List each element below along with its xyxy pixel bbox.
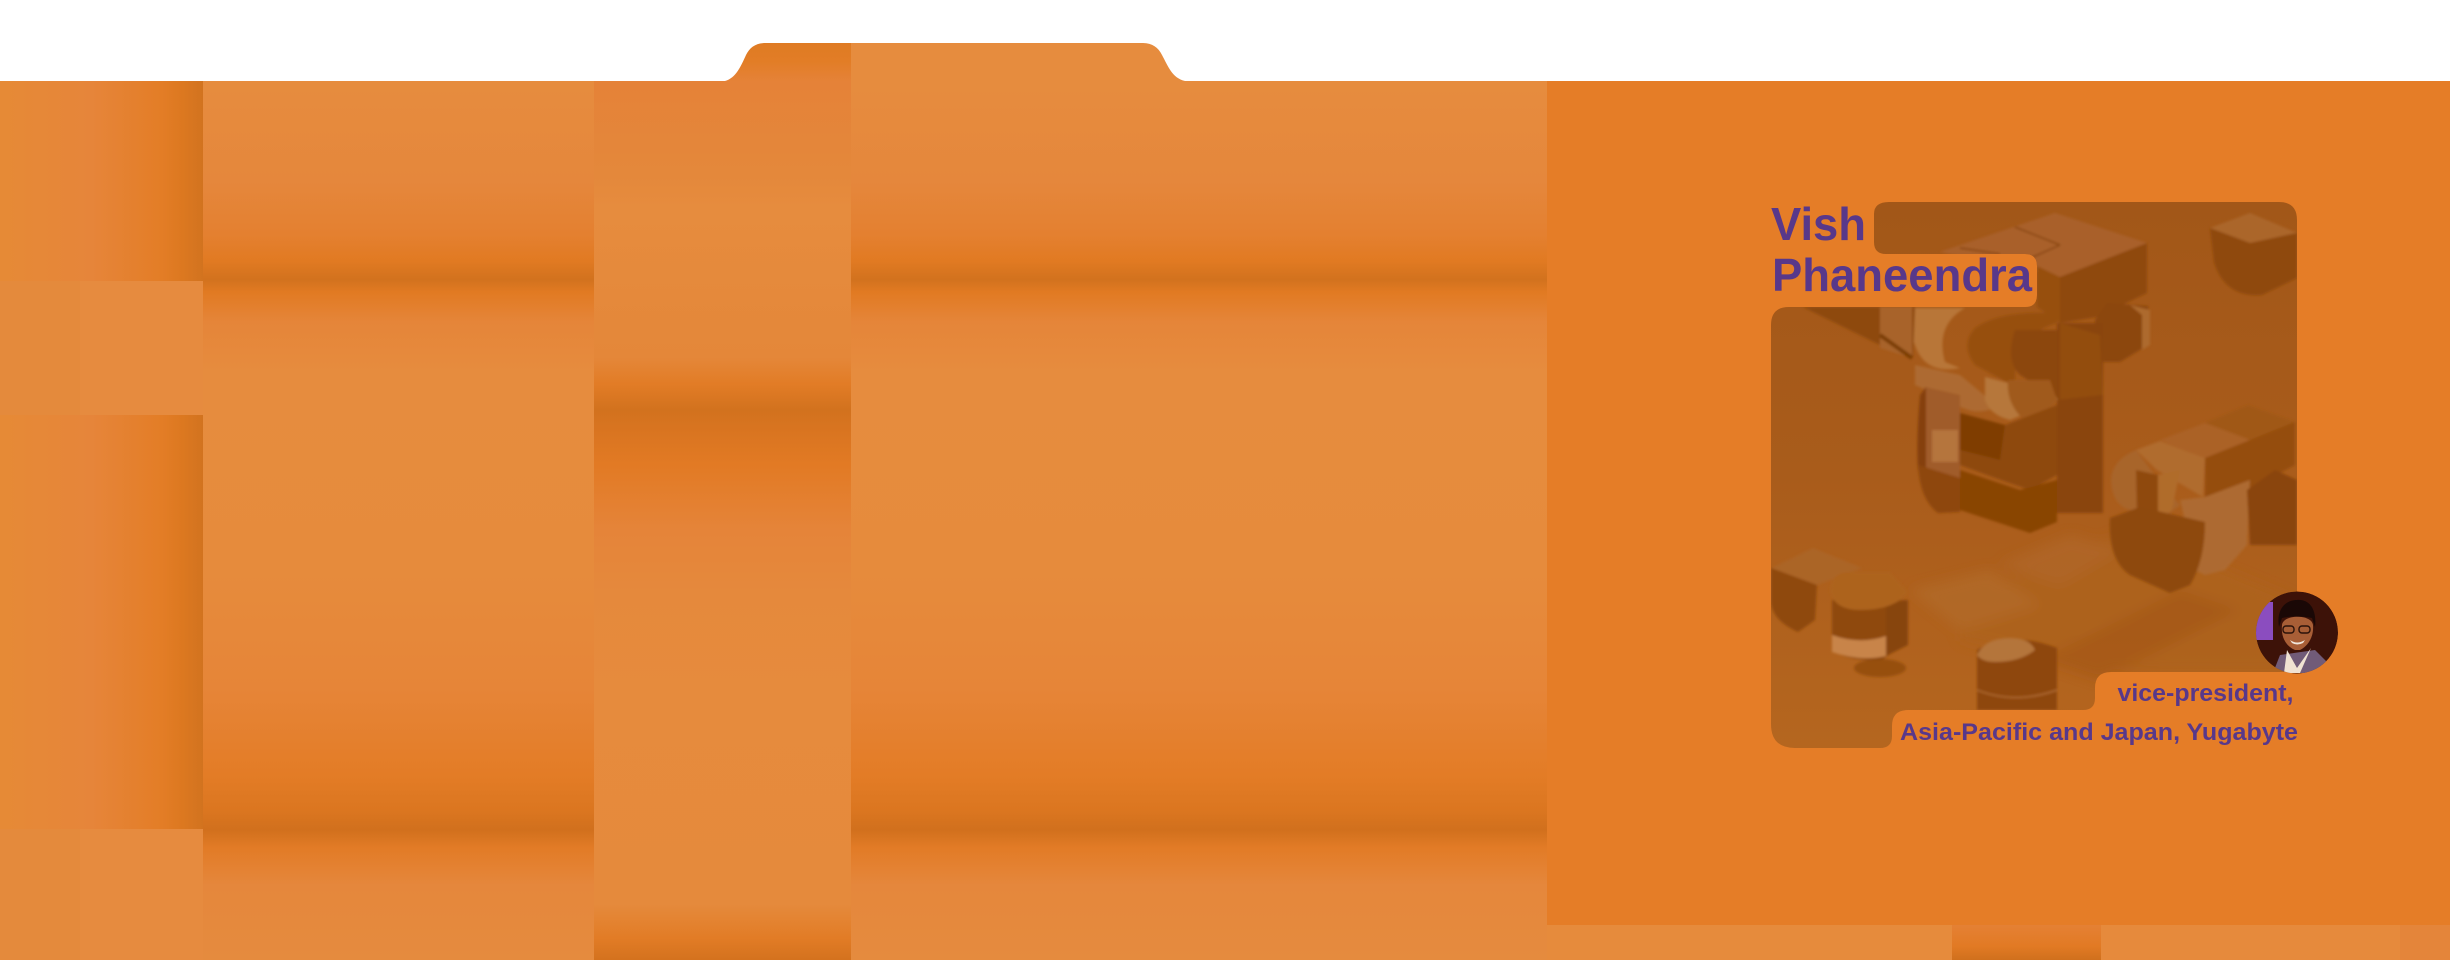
sub: striped left arm [1806, 307, 1916, 352]
sub: curved lens [1968, 313, 2057, 385]
sub: right loop [2095, 303, 2150, 362]
heading: speaker name: Vish [1771, 198, 1866, 250]
text block: speaker role [1900, 680, 2298, 746]
avatar: portrait of Vish Phaneendra [2256, 592, 2338, 674]
text block: speaker role: vice-president, [2118, 680, 2294, 707]
sub: right cluster dark lower [2110, 507, 2205, 593]
heading: speaker name: Phaneendra [1772, 249, 2032, 301]
heading: speaker name [1771, 198, 2032, 301]
sub: right cluster upper [2250, 424, 2292, 440]
sub: light crescent [1910, 308, 1965, 369]
sub: top-right cube [2210, 213, 2297, 243]
sub: middle arc [1985, 377, 2058, 420]
sub: central column [2057, 323, 2103, 513]
image: duotone isometric glass blocks [1771, 202, 2297, 748]
sub: lower dark block [1960, 405, 2057, 490]
sub: floor cube and block [1772, 548, 1862, 585]
sub: top block stack [1940, 213, 2147, 277]
sub: floor cylinder [1977, 639, 2057, 710]
text block: speaker role: Asia-Pacific and Japan, Yugabyte [1900, 719, 2298, 746]
sub: lower pill [1926, 388, 1962, 479]
panel: quote card background [1547, 81, 2450, 925]
